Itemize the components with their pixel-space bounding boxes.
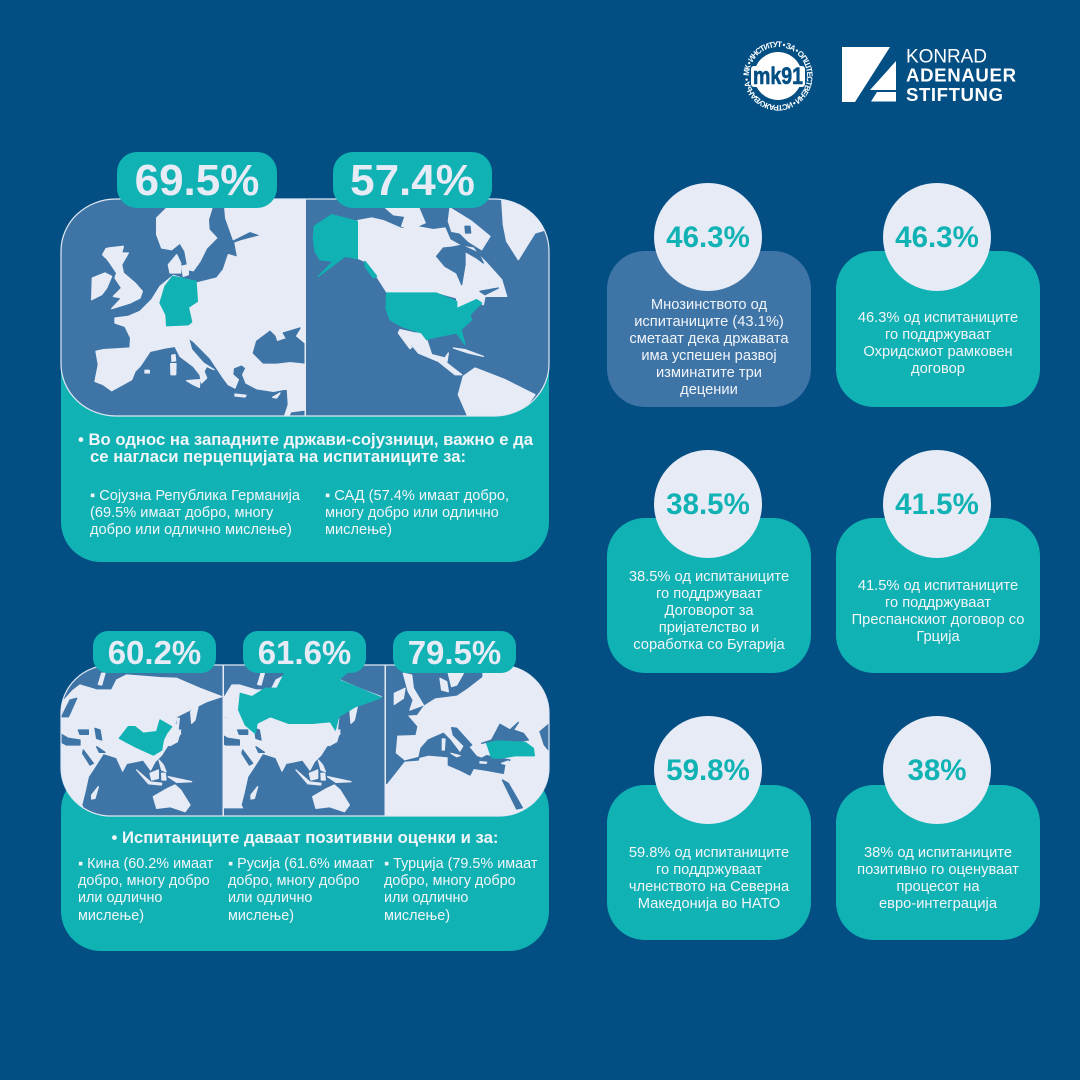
card: Ohrid agreement: го поддржуваат: [885, 327, 991, 343]
card: successful development: [607, 183, 811, 407]
card: successful development: децении: [680, 382, 738, 398]
card: NATO membership: го поддржуваат: [656, 862, 762, 878]
card: euro integration: 38%: [907, 754, 967, 787]
card: euro integration: позитивно го оценуваат: [857, 862, 1019, 878]
card: Bulgaria treaty: соработка со Бугарија: [633, 637, 785, 653]
card: euro integration: процесот на: [896, 879, 980, 895]
card: Prespa agreement: го поддржуваат: [885, 595, 991, 611]
card: euro integration: [836, 716, 1040, 940]
logo: MK91 institute: МК • ИНСТИТУТ • ЗА • ОПШТЕСТВЕНИ • ИСТРАЖУВАЊА •: [743, 41, 813, 111]
card: Bulgaria treaty: пријателство и: [659, 620, 759, 636]
text: Turkey: ▪ Турција (79.5% имаат: [384, 856, 537, 872]
card: successful development: има успешен развој: [641, 348, 777, 364]
text: Turkey: [384, 856, 538, 924]
teal text panel: [61, 770, 549, 951]
Black Sea: [253, 328, 305, 416]
badge: China 60.2%: [93, 631, 216, 673]
card: successful development: изминатите три: [656, 365, 762, 381]
card: Bulgaria treaty: [607, 450, 811, 673]
card: Ohrid agreement: [836, 183, 1040, 407]
card: Prespa agreement: 41.5%: [895, 488, 979, 521]
card: successful development: Мнозинството од: [651, 297, 767, 313]
map: North America: [312, 200, 544, 416]
text: Germany: ▪ Сојузна Република Германија: [90, 488, 300, 504]
text: China: или одлично: [78, 890, 162, 906]
text: Turkey: мислење): [384, 908, 450, 924]
logo: Konrad Adenauer Stiftung: STIFTUNG: [906, 84, 1003, 105]
heading: western allies: • Во однос на западните држави-сојузници, важно е да: [78, 430, 533, 449]
map: Turkey region: [386, 668, 548, 816]
map: China: [62, 672, 222, 812]
card: Bulgaria treaty: Договорот за: [664, 603, 754, 619]
text: USA: многу добро или одлично: [325, 505, 499, 521]
card: NATO membership: 59.8% од испитаниците: [629, 845, 789, 861]
text: Russia: [228, 856, 374, 924]
teal text panel: [61, 300, 549, 562]
card: NATO membership: Македонија во НАТО: [638, 896, 780, 912]
text: Germany: (69.5% имаат добро, многу: [90, 505, 273, 521]
card: Ohrid agreement: Охридскиот рамковен: [863, 344, 1013, 360]
card: Prespa agreement: Преспанскиот договор со: [852, 612, 1024, 628]
card: Prespa agreement: 41.5% од испитаниците: [858, 578, 1018, 594]
text: USA: ▪ САД (57.4% имаат добро,: [325, 488, 509, 504]
card: Bulgaria treaty: 38.5% од испитаниците: [629, 569, 789, 585]
text: Russia: ▪ Русија (61.6% имаат: [228, 856, 374, 872]
card: Bulgaria treaty: 38.5%: [666, 488, 750, 521]
card: Prespa agreement: [836, 450, 1040, 673]
maps: Germany and USA: [60, 198, 550, 417]
logo: Konrad Adenauer Stiftung: ADENAUER: [906, 65, 1017, 86]
text: Germany: добро или одлично мислење): [90, 522, 292, 538]
map: Russia: [224, 673, 382, 812]
logo: Konrad Adenauer Stiftung: KONRAD: [906, 47, 987, 68]
heading: positive ratings: • Испитаниците даваат позитивни оценки и за:: [112, 828, 498, 847]
badge: Germany 69.5%: [117, 152, 277, 208]
text: Turkey: добро, многу добро: [384, 873, 516, 889]
card: NATO membership: членството на Северна: [629, 879, 789, 895]
badge: Turkey 79.5%: [393, 631, 516, 673]
badge: Russia 61.6%: [243, 631, 366, 673]
logo: MK91 institute: mk91: [753, 63, 803, 90]
card: NATO membership: 59.8%: [666, 754, 750, 787]
card: Ohrid agreement: договор: [911, 361, 965, 377]
maps: China, Russia, Turkey: [60, 664, 550, 817]
badge: USA 57.4%: [333, 152, 492, 208]
card: euro integration: 38% од испитаниците: [864, 845, 1012, 861]
Germany: [160, 276, 197, 326]
text: Turkey: или одлично: [384, 890, 468, 906]
text: Russia: или одлично: [228, 890, 312, 906]
card: Ohrid agreement: 46.3%: [895, 221, 979, 254]
badge: Russia 61.6%: 61.6%: [258, 634, 351, 671]
card: successful development: 46.3%: [666, 221, 750, 254]
text: China: ▪ Кина (60.2% имаат: [78, 856, 213, 872]
text: China: мислење): [78, 908, 144, 924]
card: Ohrid agreement: 46.3% од испитаниците: [858, 310, 1018, 326]
logo: Konrad Adenauer Stiftung: [842, 47, 1017, 105]
panel: other countries: [60, 631, 550, 951]
card: successful development: испитаниците (43.1%): [634, 314, 784, 330]
text: Russia: добро, многу добро: [228, 873, 360, 889]
card: euro integration: евро-интеграција: [879, 896, 997, 912]
badge: China 60.2%: 60.2%: [108, 634, 201, 671]
badge: Turkey 79.5%: 79.5%: [408, 634, 501, 671]
text: USA: мислење): [325, 522, 392, 538]
badge: Germany 69.5%: 69.5%: [135, 156, 259, 205]
text: USA: [325, 488, 509, 538]
heading: western allies: [78, 430, 534, 466]
text: Germany: [90, 488, 300, 538]
card: successful development: сметаат дека државата: [629, 331, 789, 347]
text: China: [78, 856, 213, 924]
card: NATO membership: [607, 716, 811, 940]
panel: western allies: [60, 152, 550, 562]
card: Bulgaria treaty: го поддржуваат: [656, 586, 762, 602]
card: Prespa agreement: Грција: [916, 629, 960, 645]
text: China: добро, многу добро: [78, 873, 210, 889]
heading: western allies: се нагласи перцепцијата на испитаниците за:: [90, 447, 466, 466]
map: Europe: [91, 200, 304, 416]
text: Russia: мислење): [228, 908, 294, 924]
badge: USA 57.4%: 57.4%: [350, 156, 475, 205]
